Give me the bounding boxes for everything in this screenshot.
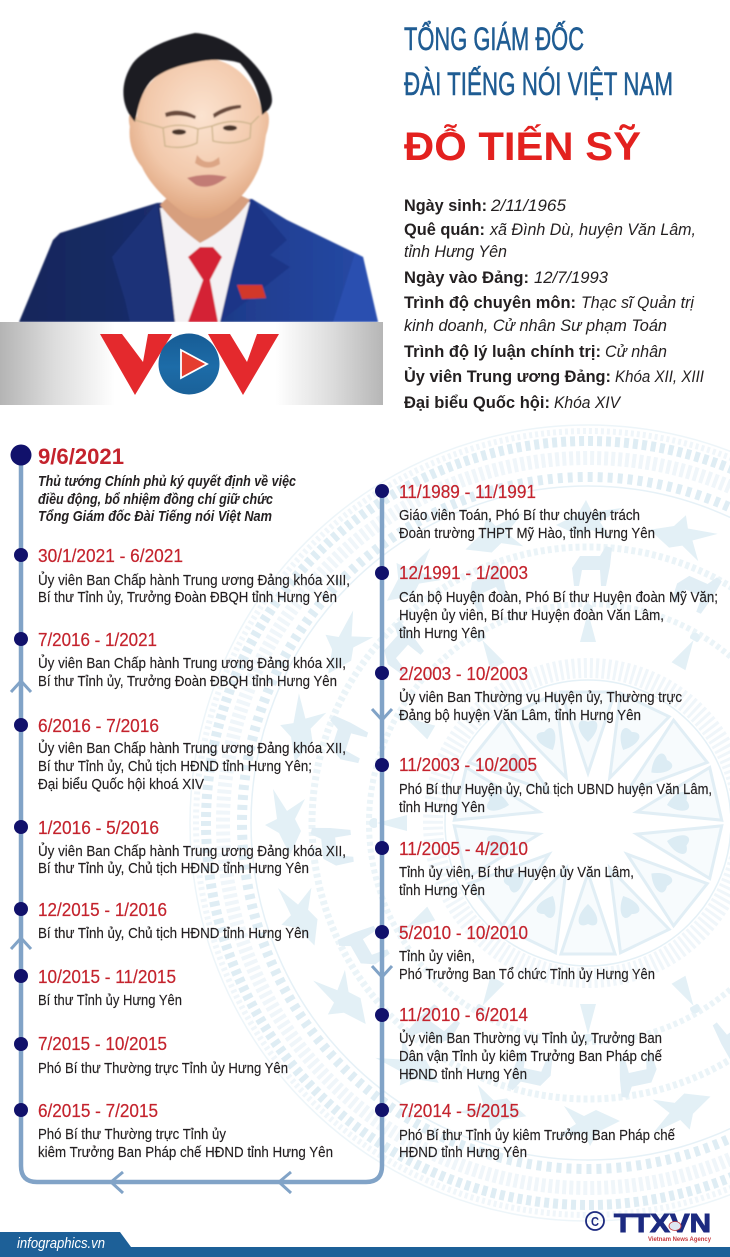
entry: 11/1989 - 11/1991 [375, 481, 655, 542]
entry: 10/2015 - 11/2015: Bí thư Tỉnh ủy Hưng Yên [38, 993, 182, 1009]
personal details: kinh doanh, Cử nhân Sư phạm Toán [404, 317, 667, 335]
entry: 7/2015 - 10/2015: 7/2015 - 10/2015 [38, 1033, 167, 1054]
entry: 12/1991 - 1/2003: tỉnh Hưng Yên [399, 626, 485, 642]
entry: 11/2010 - 6/2014: 11/2010 - 6/2014 [399, 1004, 528, 1025]
arrow: timeline up, left lower [11, 938, 31, 949]
entry: 6/2016 - 7/2016: Đại biểu Quốc hội khoá XIV [38, 777, 204, 793]
footer bar with site name [0, 1232, 730, 1257]
entry: 11/2005 - 4/2010: 11/2005 - 4/2010 [399, 838, 528, 859]
arrow: timeline down, right upper [372, 709, 392, 720]
entry: 30/1/2021 - 6/2021 [14, 545, 350, 606]
entry: 11/2010 - 6/2014: Dân vận Tỉnh ủy kiêm Trưởng Ban Pháp chế [399, 1049, 662, 1065]
entry: 7/2016 - 1/2021: Ủy viên Ban Chấp hành Trung ương Đảng khóa XII, [38, 654, 346, 672]
entry: 2/2003 - 10/2003: Đảng bộ huyện Văn Lâm, tỉnh Hưng Yên [399, 708, 641, 724]
personal details: Ngày vào Đảng: [404, 269, 529, 287]
entry: 7/2014 - 5/2015: 7/2014 - 5/2015 [399, 1100, 519, 1121]
entry: 1/2016 - 5/2016 [14, 817, 346, 877]
entry: 12/1991 - 1/2003: Huyện ủy viên, Bí thư Huyện đoàn Văn Lâm, [399, 608, 664, 624]
entry: 9/6/2021 [10, 444, 296, 525]
portrait of Đỗ Tiến Sỹ [19, 33, 378, 322]
TTXVN logo: Vietnam News Agency [648, 1236, 711, 1243]
entry: 12/2015 - 1/2016 [14, 899, 309, 942]
personal details: xã Đình Dù, huyện Văn Lâm, [489, 221, 696, 239]
entry: 9/6/2021: Thủ tướng Chính phủ ký quyết định về việc [38, 474, 296, 490]
TTXVN logo: TTXVN [614, 1208, 711, 1238]
VOV logo [100, 334, 279, 395]
entry: 30/1/2021 - 6/2021: Bí thư Tỉnh ủy, Trưởng Đoàn ĐBQH tỉnh Hưng Yên [38, 590, 337, 606]
entry: 11/2010 - 6/2014: Ủy viên Ban Thường vụ Tỉnh ủy, Trưởng Ban [399, 1029, 662, 1047]
personal details: Quê quán: [404, 221, 485, 239]
TTXVN logo [586, 1208, 711, 1243]
entry: 6/2016 - 7/2016: Bí thư Tỉnh ủy, Chủ tịch HĐND tỉnh Hưng Yên; [38, 759, 312, 775]
entry: 6/2016 - 7/2016: 6/2016 - 7/2016 [38, 715, 159, 736]
entry: 11/2005 - 4/2010 [375, 838, 634, 899]
entry: 11/2005 - 4/2010: tỉnh Hưng Yên [399, 883, 485, 899]
name heading: ĐỖ TIẾN SỸ [404, 123, 641, 169]
entry: 6/2015 - 7/2015: Phó Bí thư Thường trực Tỉnh ủy [38, 1127, 227, 1143]
personal details: tỉnh Hưng Yên [404, 243, 507, 261]
entry: 30/1/2021 - 6/2021: Ủy viên Ban Chấp hành Trung ương Đảng khóa XIII, [38, 571, 350, 589]
timeline line [21, 456, 382, 1182]
entry: 7/2015 - 10/2015 [14, 1033, 288, 1077]
entry: 6/2016 - 7/2016: Ủy viên Ban Chấp hành Trung ương Đảng khóa XII, [38, 739, 346, 757]
entry: 9/6/2021: điều động, bổ nhiệm đồng chí giữ chức [38, 492, 273, 508]
personal details [404, 197, 704, 412]
entry: 7/2014 - 5/2015 [375, 1100, 675, 1161]
entry: 6/2015 - 7/2015 [14, 1100, 333, 1161]
entry: 12/1991 - 1/2003: 12/1991 - 1/2003 [399, 562, 528, 583]
entry: 7/2014 - 5/2015: Phó Bí thư Tỉnh ủy kiêm Trưởng Ban Pháp chế [399, 1128, 675, 1144]
entry: 1/2016 - 5/2016: 1/2016 - 5/2016 [38, 817, 159, 838]
entry: 11/1989 - 11/1991: Đoàn trường THPT Mỹ Hào, tỉnh Hưng Yên [399, 526, 655, 542]
arrow: timeline down, right lower [372, 966, 392, 977]
arrow: timeline leftward, bottom right [279, 1172, 291, 1193]
entry: 10/2015 - 11/2015: 10/2015 - 11/2015 [38, 966, 176, 987]
entry: 11/2010 - 6/2014 [375, 1004, 662, 1083]
entry: 7/2016 - 1/2021: 7/2016 - 1/2021 [38, 629, 157, 650]
entry: 11/2010 - 6/2014: HĐND tỉnh Hưng Yên [399, 1067, 527, 1083]
entry: 9/6/2021: Tổng Giám đốc Đài Tiếng nói Việt Nam [38, 509, 272, 525]
entry: 11/1989 - 11/1991: 11/1989 - 11/1991 [399, 481, 536, 502]
entry: 7/2016 - 1/2021 [14, 629, 346, 690]
entry: 9/6/2021: 9/6/2021 [38, 444, 124, 469]
entry: 2/2003 - 10/2003: Ủy viên Ban Thường vụ Huyện ủy, Thường trực [399, 688, 682, 706]
personal details: Thạc sĩ Quản trị [581, 294, 695, 312]
entry: 12/1991 - 1/2003 [375, 562, 718, 642]
entry: 6/2016 - 7/2016 [14, 715, 346, 793]
entry: 11/2003 - 10/2005: 11/2003 - 10/2005 [399, 754, 537, 775]
personal details: Ngày sinh: [404, 197, 487, 215]
personal details: Cử nhân [605, 343, 667, 361]
entry: 1/2016 - 5/2016: Ủy viên Ban Chấp hành Trung ương Đảng khóa XII, [38, 842, 346, 860]
arrow: timeline up, left upper [11, 681, 31, 692]
entry: 30/1/2021 - 6/2021: 30/1/2021 - 6/2021 [38, 545, 183, 566]
TTXVN logo: C [591, 1214, 600, 1229]
entry: 7/2014 - 5/2015: HĐND tỉnh Hưng Yên [399, 1145, 527, 1161]
entry: 2/2003 - 10/2003 [375, 663, 682, 724]
personal details: 2/11/1965 [490, 197, 567, 215]
logo band [0, 322, 383, 405]
entry: 5/2010 - 10/2010: Tỉnh ủy viên, [399, 949, 475, 965]
entry: 11/1989 - 11/1991: Giáo viên Toán, Phó Bí thư chuyên trách [399, 508, 640, 524]
footer bar with site name: infographics.vn [17, 1235, 105, 1252]
entry: 5/2010 - 10/2010: 5/2010 - 10/2010 [399, 922, 528, 943]
personal details: Trình độ chuyên môn: [404, 294, 576, 312]
personal details: Khóa XII, XIII [615, 368, 704, 386]
personal details: 12/7/1993 [534, 269, 609, 287]
personal details: Khóa XIV [554, 394, 622, 412]
entry: 6/2015 - 7/2015: 6/2015 - 7/2015 [38, 1100, 158, 1121]
entry: 11/2003 - 10/2005 [375, 754, 712, 816]
entry: 10/2015 - 11/2015 [14, 966, 182, 1009]
entry: 1/2016 - 5/2016: Bí thư Tỉnh ủy, Chủ tịch HĐND tỉnh Hưng Yên [38, 861, 309, 877]
title [404, 21, 673, 102]
entry: 11/2003 - 10/2005: tỉnh Hưng Yên [399, 800, 485, 816]
entry: 5/2010 - 10/2010 [375, 922, 655, 983]
personal details: Trình độ lý luận chính trị: [404, 343, 601, 361]
entry: 12/2015 - 1/2016: 12/2015 - 1/2016 [38, 899, 167, 920]
entry: 11/2005 - 4/2010: Tỉnh ủy viên, Bí thư Huyện ủy Văn Lâm, [399, 865, 634, 881]
entry: 7/2015 - 10/2015: Phó Bí thư Thường trực Tỉnh ủy Hưng Yên [38, 1061, 288, 1077]
title: TỔNG GIÁM ĐỐC [404, 21, 584, 57]
background: bronze drum pattern [190, 425, 730, 1221]
arrow: timeline leftward, bottom left [111, 1172, 123, 1193]
entry: 12/2015 - 1/2016: Bí thư Tỉnh ủy, Chủ tịch HĐND tỉnh Hưng Yên [38, 926, 309, 942]
entry: 2/2003 - 10/2003: 2/2003 - 10/2003 [399, 663, 528, 684]
entry: 7/2016 - 1/2021: Bí thư Tỉnh ủy, Trưởng Đoàn ĐBQH tỉnh Hưng Yên [38, 674, 337, 690]
personal details: Đại biểu Quốc hội: [404, 394, 550, 412]
personal details: Ủy viên Trung ương Đảng: [404, 367, 611, 386]
entry: 6/2015 - 7/2015: kiêm Trưởng Ban Pháp chế HĐND tỉnh Hưng Yên [38, 1145, 333, 1161]
entry: 5/2010 - 10/2010: Phó Trưởng Ban Tổ chức Tỉnh ủy Hưng Yên [399, 967, 655, 983]
